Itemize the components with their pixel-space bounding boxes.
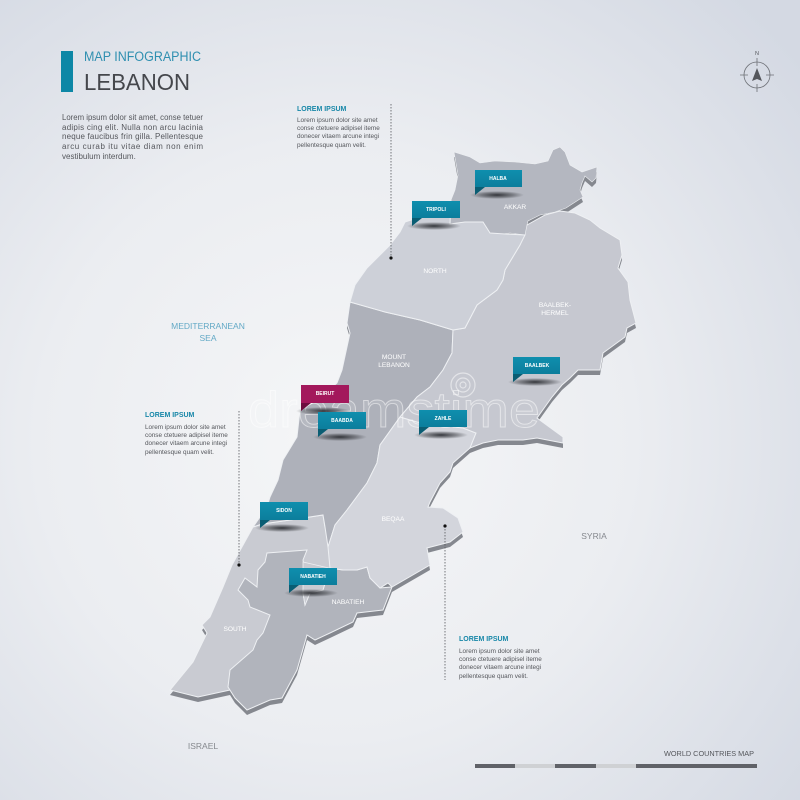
callout leader: [237, 411, 241, 567]
marker: Baalbek: [508, 357, 562, 386]
label: Mediterranean Sea: SEA: [199, 333, 217, 343]
accent bar: [61, 51, 73, 92]
marker: Nabatieh: [284, 568, 338, 597]
country name: LEBANON: [84, 69, 190, 95]
callout text: Lorem ipsum dolor site amet: [459, 648, 540, 655]
marker: Nabatieh: NABATIEH: [300, 574, 326, 580]
enclave: [303, 562, 329, 605]
region: Akkar: [450, 147, 597, 235]
intro text: neque faucibus frin gilla. Pellentesque: [62, 132, 204, 141]
scale bar: [475, 764, 757, 768]
region: South: [170, 515, 330, 697]
legend caption: WORLD COUNTRIES MAP: [664, 749, 754, 758]
callout text: donecer vitaem arcune integi: [297, 133, 379, 140]
region labels: LEBANON: [378, 362, 410, 369]
marker: Baabda: BAABDA: [331, 418, 353, 424]
region: Baalbek-Hermel: [400, 211, 636, 448]
region: Mount Lebanon: [253, 302, 453, 547]
marker: Tripoli: [407, 201, 461, 230]
callout text: donecer vitaem arcune integi: [459, 664, 541, 671]
region labels: MOUNT: [382, 354, 406, 361]
intro text: vestibulum interdum.: [62, 152, 136, 161]
region labels: BEQAA: [382, 516, 405, 523]
callout text: [145, 424, 228, 456]
intro text: Lorem ipsum dolor sit amet, conse tetuer: [62, 113, 203, 122]
icon: compass: [740, 51, 774, 92]
marker: Zahle: [414, 410, 468, 439]
callout text: [459, 648, 542, 680]
label: Syria: SYRIA: [581, 531, 607, 541]
marker: Halba: [470, 170, 524, 199]
subtitle: MAP INFOGRAPHIC: [84, 49, 201, 64]
marker: Baabda: [313, 412, 367, 441]
marker: Sidon: SIDON: [276, 508, 292, 514]
callout text: conse ctetuere adipisel iteme: [459, 656, 542, 663]
callout heading: LOREM IPSUM: [145, 412, 195, 419]
callout text: conse ctetuere adipisel iteme: [297, 125, 380, 132]
map of Lebanon: [170, 147, 636, 715]
callout: top: [297, 104, 393, 260]
callout text: conse ctetuere adipisel iteme: [145, 432, 228, 439]
marker: Baalbek: BAALBEK: [525, 363, 550, 369]
label: Israel: ISRAEL: [188, 741, 218, 751]
callout text: [297, 117, 380, 149]
marker: Halba: HALBA: [489, 176, 507, 182]
region labels: AKKAR: [504, 204, 526, 211]
intro text: [62, 113, 204, 161]
callout text: pellentesque quam velit.: [297, 142, 366, 149]
region labels: [223, 204, 571, 633]
callout text: Lorem ipsum dolor site amet: [297, 117, 378, 124]
callout text: donecer vitaem arcune integi: [145, 440, 227, 447]
marker: Zahle: ZAHLE: [435, 416, 452, 422]
callout leader: [443, 524, 447, 680]
watermark: dreamstime: [248, 382, 540, 438]
region: Beqaa: [328, 417, 476, 588]
scale legend: [475, 749, 757, 768]
callout text: pellentesque quam velit.: [145, 449, 214, 456]
marker: Tripoli: TRIPOLI: [426, 207, 446, 213]
callout heading: LOREM IPSUM: [297, 106, 347, 113]
region labels: NABATIEH: [332, 599, 364, 606]
callout: bottom right: [443, 524, 542, 680]
callout leader: [389, 104, 393, 260]
marker: Beirut: [296, 385, 350, 415]
label: Mediterranean Sea: MEDITERRANEAN: [171, 321, 245, 331]
icon: compass: N: [755, 51, 759, 57]
callout: left: [145, 411, 241, 567]
callout text: Lorem ipsum dolor site amet: [145, 424, 226, 431]
label: Mediterranean Sea: [171, 321, 245, 343]
region labels: SOUTH: [223, 626, 247, 633]
title block: [61, 49, 201, 95]
marker: Beirut: BEIRUT: [316, 391, 334, 397]
intro text: adipis cing elit. Nulla non arcu lacinia: [62, 123, 204, 132]
region labels: NORTH: [423, 268, 447, 275]
marker: Sidon: [255, 502, 309, 532]
region: Nabatieh: [228, 550, 392, 710]
region labels: BAALBEK-: [539, 302, 571, 309]
region: North: [350, 200, 525, 330]
intro text: arcu curab itu vitae diam non enim: [62, 142, 203, 151]
callout heading: LOREM IPSUM: [459, 636, 509, 643]
callout text: pellentesque quam velit.: [459, 673, 528, 680]
map extrusion: [170, 152, 636, 715]
region labels: HERMEL: [541, 310, 569, 317]
